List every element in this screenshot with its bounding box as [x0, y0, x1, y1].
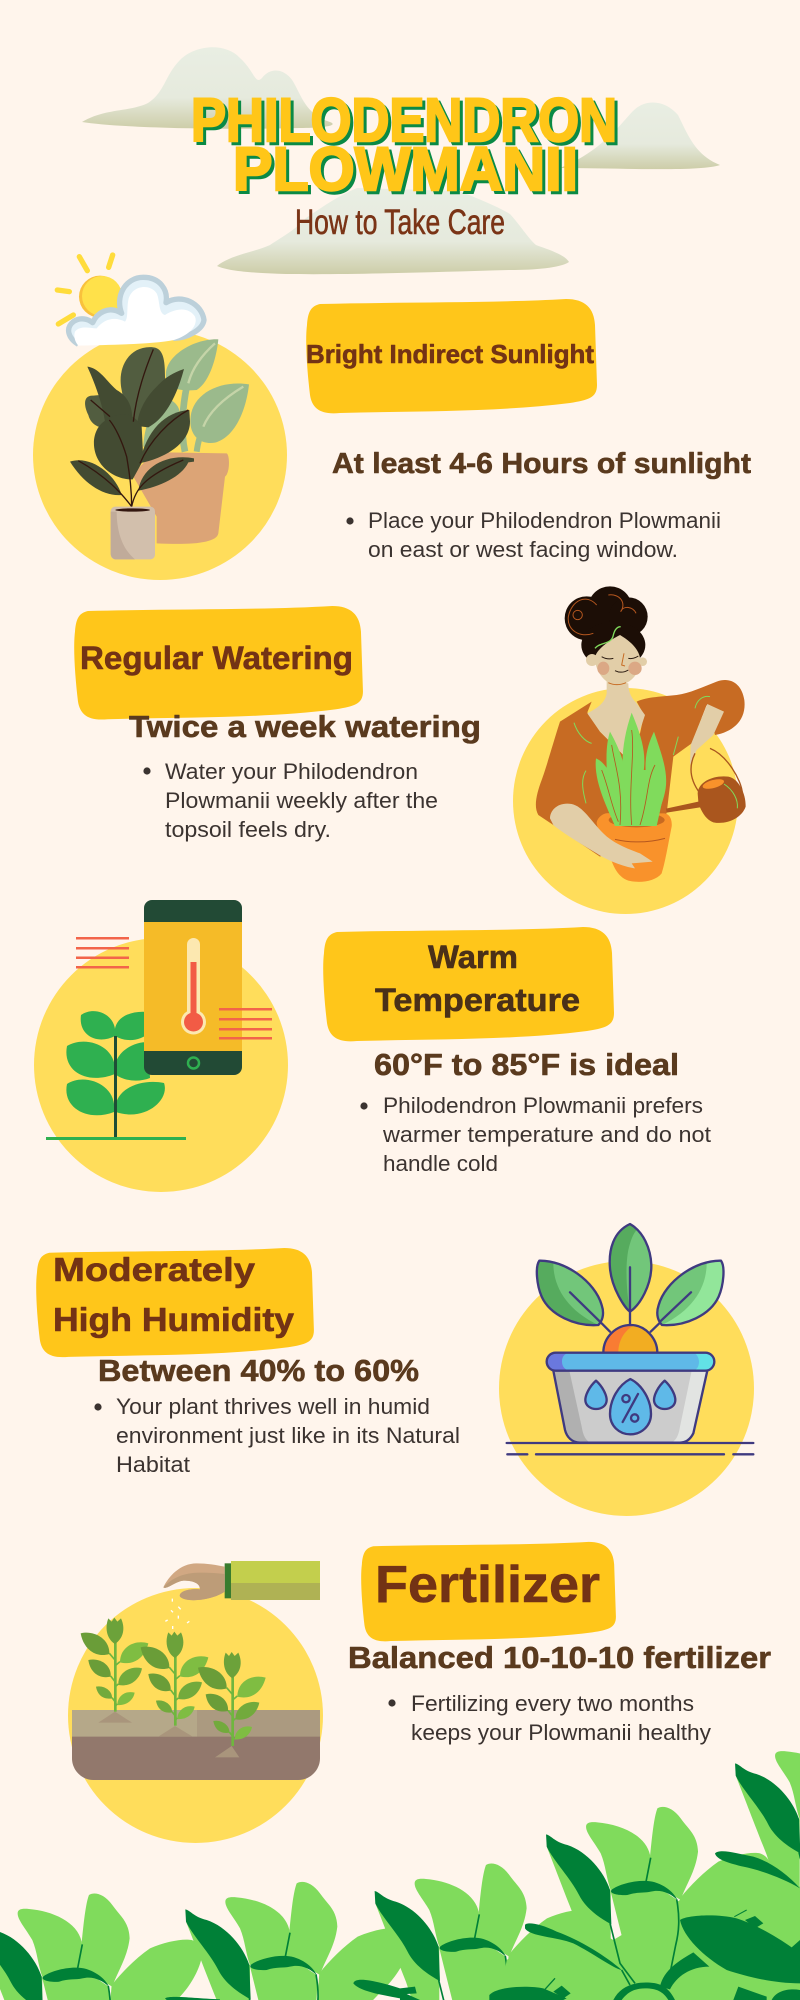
subheading: sunlight: At least 4-6 Hours of sunlight — [332, 448, 751, 480]
heading: humidity: High Humidity — [53, 1301, 295, 1338]
panel: watering — [74, 586, 746, 914]
badge: sunlight — [306, 299, 597, 413]
panel: fertilizer — [68, 1542, 771, 1843]
bullet: temperature: Philodendron Plowmanii prefers — [383, 1093, 703, 1118]
heading: sunlight: Bright Indirect Sunlight — [306, 339, 594, 369]
subheading: temperature: 60°F to 85°F is ideal — [374, 1047, 679, 1082]
bullet: temperature: warmer temperature and do not — [382, 1122, 711, 1147]
badge: humidity — [36, 1248, 314, 1357]
icon: bowl with leaves and droplets — [507, 1224, 753, 1454]
bullet: temperature: handle cold — [383, 1151, 498, 1176]
icon: hand sprinkling fertilizer on seedlings — [72, 1561, 320, 1780]
bullet: fertilizer: Fertilizing every two months — [411, 1691, 694, 1716]
heading: temperature: Warm — [428, 939, 518, 975]
bullet: fertilizer — [388, 1691, 711, 1745]
icon: woman watering a plant — [536, 586, 746, 882]
yellow circle: watering — [513, 688, 738, 914]
bullet: sunlight — [346, 508, 721, 562]
heading: humidity: Moderately — [53, 1251, 256, 1288]
bullet: humidity: Your plant thrives well in humid — [116, 1394, 430, 1419]
bullet: humidity: Habitat — [116, 1452, 190, 1477]
icon: heat lines — [76, 937, 272, 1040]
icon: potted plants with sun and cloud — [57, 255, 249, 559]
yellow circle: fertilizer — [68, 1588, 323, 1843]
bullet: sunlight: on east or west facing window. — [368, 537, 678, 562]
panel: humidity — [36, 1224, 754, 1516]
yellow circle: sunlight — [33, 330, 287, 580]
bullet: humidity: environment just like in its Natural — [116, 1423, 460, 1448]
badge: fertilizer — [361, 1542, 616, 1641]
foliage border at the bottom — [0, 1736, 800, 2000]
yellow circle: temperature — [34, 938, 288, 1192]
bullet: humidity — [94, 1394, 460, 1477]
heading: humidity — [53, 1251, 295, 1338]
title: PHILODENDRON — [191, 86, 617, 154]
title — [191, 86, 617, 203]
bullet: sunlight: Place your Philodendron Plowmanii — [368, 508, 721, 533]
bullet: watering — [143, 759, 438, 842]
bullet: watering: Water your Philodendron — [165, 759, 418, 784]
panel: temperature — [34, 900, 711, 1192]
icon: sprout — [46, 1011, 186, 1140]
bullet: fertilizer: keeps your Plowmanii healthy — [411, 1720, 711, 1745]
subheading: humidity: Between 40% to 60% — [98, 1353, 419, 1388]
heading: fertilizer: Fertilizer — [375, 1556, 600, 1614]
bullet: watering: topsoil feels dry. — [165, 817, 331, 842]
bullet: watering: Plowmanii weekly after the — [165, 788, 438, 813]
yellow circle: humidity — [499, 1261, 754, 1516]
icon: phone with thermometer — [144, 900, 242, 1075]
badge: watering — [74, 606, 363, 720]
panel: sunlight — [33, 255, 751, 580]
heading: watering: Regular Watering — [80, 640, 353, 676]
subtitle: How to Take Care — [295, 203, 505, 242]
title: PLOWMANII — [233, 135, 578, 203]
heading: temperature — [375, 939, 580, 1018]
bullet: temperature — [360, 1093, 711, 1176]
subheading: fertilizer: Balanced 10-10-10 fertilizer — [348, 1640, 771, 1675]
subheading: watering: Twice a week watering — [129, 709, 481, 744]
badge: temperature — [323, 927, 614, 1041]
heading: temperature: Temperature — [375, 982, 580, 1018]
header clouds — [82, 47, 720, 274]
